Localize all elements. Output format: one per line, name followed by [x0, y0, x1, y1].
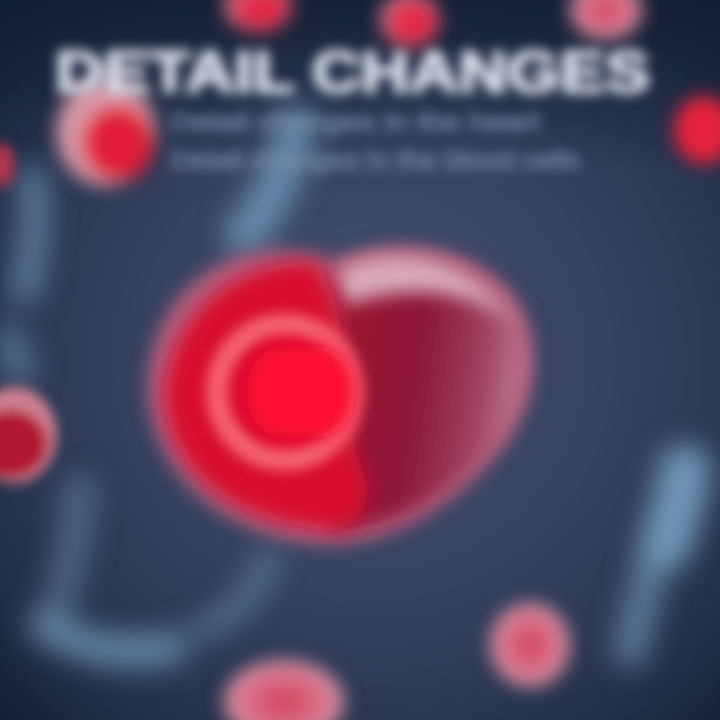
title: DETAIL CHANGES	[55, 40, 650, 105]
strand: lower right blob	[665, 470, 685, 545]
strand: lower left loop	[45, 625, 170, 651]
strand: left middle	[10, 340, 20, 370]
heart	[148, 247, 534, 544]
cell: top right	[570, 0, 642, 40]
cell: right edge	[674, 96, 720, 164]
cell: beside title	[56, 78, 156, 186]
strand: upper centre	[245, 125, 295, 235]
cell: top left	[224, 0, 292, 32]
heart left red body	[165, 262, 367, 530]
heart ring	[217, 324, 353, 460]
subtitle	[170, 109, 580, 174]
strand: lower right tail	[630, 570, 650, 650]
heart right lobe	[330, 261, 523, 530]
strand: upper left	[25, 180, 35, 290]
heart glow outline	[148, 247, 534, 544]
background top shading	[0, 0, 720, 170]
cell: left edge small	[0, 143, 14, 187]
heart core	[248, 347, 354, 437]
strand: lower curve	[200, 560, 268, 630]
blue vessel strands	[10, 125, 685, 651]
strand: lower left column	[60, 490, 80, 600]
subtitle: Detail changes in the heart	[170, 109, 540, 136]
heart right lobe highlight	[335, 254, 515, 325]
cell: top centre	[380, 0, 440, 48]
cell: bottom right	[490, 603, 570, 687]
cell: left edge large	[0, 387, 57, 483]
subtitle: Detail changes in the blood cells	[170, 147, 580, 174]
cell: bottom centre	[224, 660, 344, 720]
